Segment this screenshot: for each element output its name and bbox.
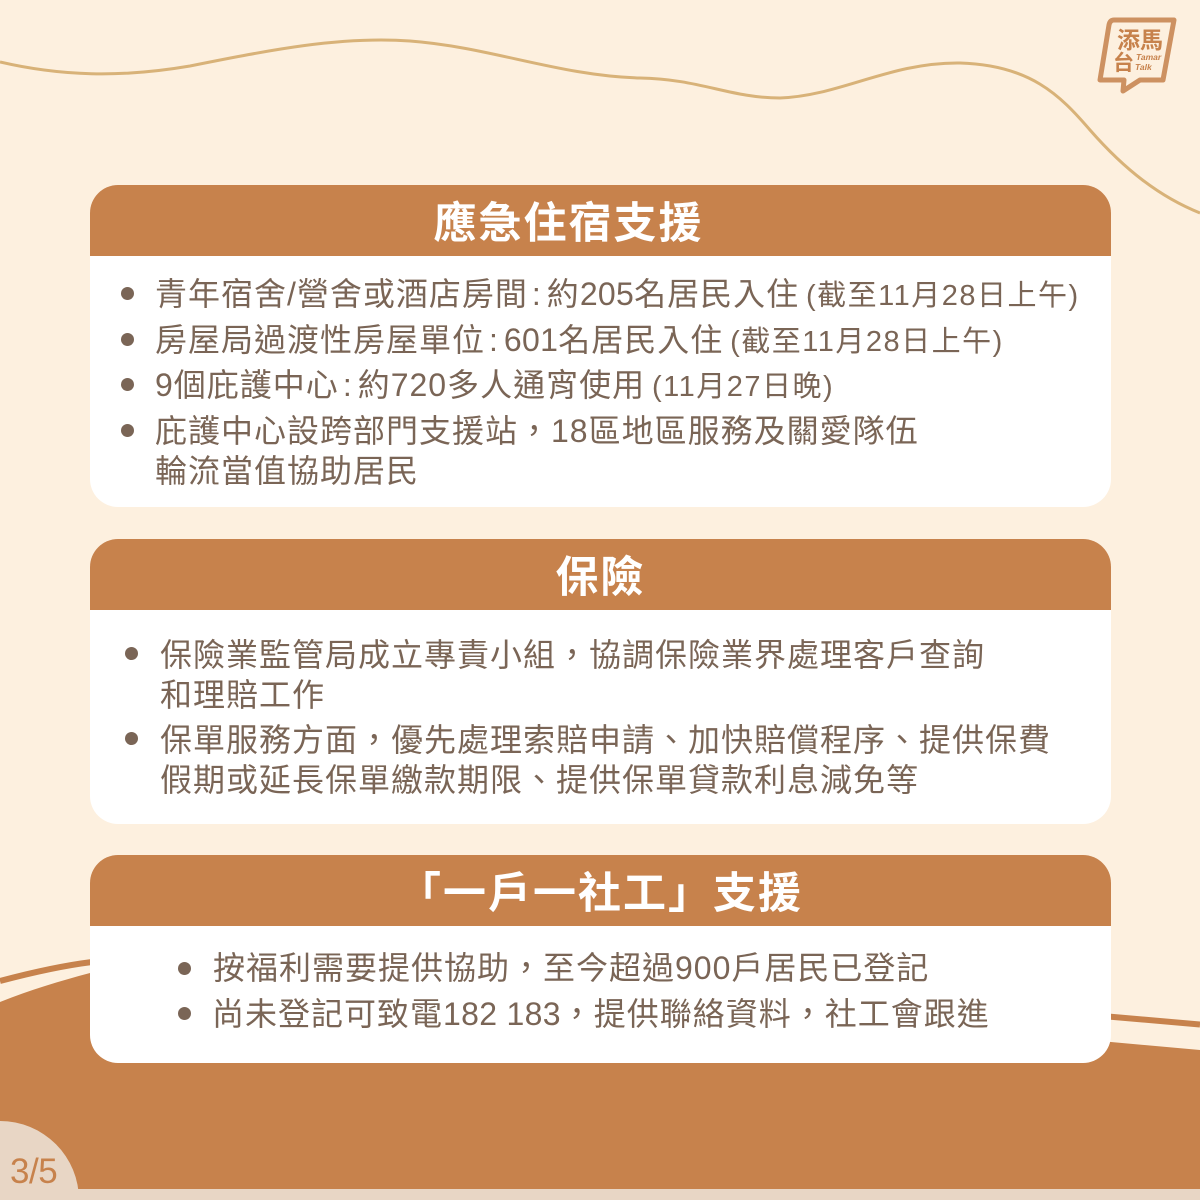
logo — [1098, 18, 1176, 94]
panel: insurance — [90, 539, 1111, 824]
bullet 2: 尚未登記可致電182 183，提供聯絡資料，社工會跟進 — [212, 996, 990, 1032]
heading band: insurance — [90, 539, 1111, 610]
heading band: social worker support — [90, 855, 1111, 926]
heading: 應急住宿支援 — [434, 189, 704, 251]
logo: Talk — [1135, 62, 1153, 72]
bullet 1 — [125, 637, 985, 713]
bullet 2: 假期或延長保單繳款期限、提供保單貸款利息減免等 — [160, 762, 919, 798]
bullet 4: 輪流當值協助居民 — [155, 453, 419, 489]
heading: 「一戶一社工」支援 — [398, 859, 803, 921]
bullet 1: 保險業監管局成立專責小組，協調保險業界處理客戶查詢 — [160, 637, 985, 673]
page number badge — [0, 1121, 79, 1200]
panel: emergency accommodation — [90, 185, 1111, 507]
page number: 3/5 — [10, 1152, 57, 1191]
bullet 1: 青年宿舍/營舍或酒店房間:約205名居民入住 (截至11月28日上午) — [155, 276, 1080, 312]
logo: Tamar — [1136, 52, 1162, 62]
logo: 台 — [1113, 47, 1134, 77]
heading: 保險 — [556, 543, 646, 605]
heading band: emergency accommodation — [90, 185, 1111, 256]
bullet 3: 9個庇護中心:約720多人通宵使用 (11月27日晚) — [155, 367, 834, 403]
bullet 1: 按福利需要提供協助，至今超過900戶居民已登記 — [213, 950, 929, 986]
bullet 2 — [125, 722, 1051, 798]
bullet 2: 保單服務方面，優先處理索賠申請、加快賠償程序、提供保費 — [160, 722, 1051, 758]
bullet 1: 和理賠工作 — [160, 677, 325, 713]
bullet 2: 房屋局過渡性房屋單位:601名居民入住 (截至11月28日上午) — [155, 322, 1004, 358]
bullet 4 — [121, 413, 919, 489]
logo: 添馬 — [1117, 21, 1163, 55]
bullet 4: 庇護中心設跨部門支援站，18區地區服務及關愛隊伍 — [155, 413, 919, 449]
panel: one household one social worker — [90, 855, 1111, 1063]
